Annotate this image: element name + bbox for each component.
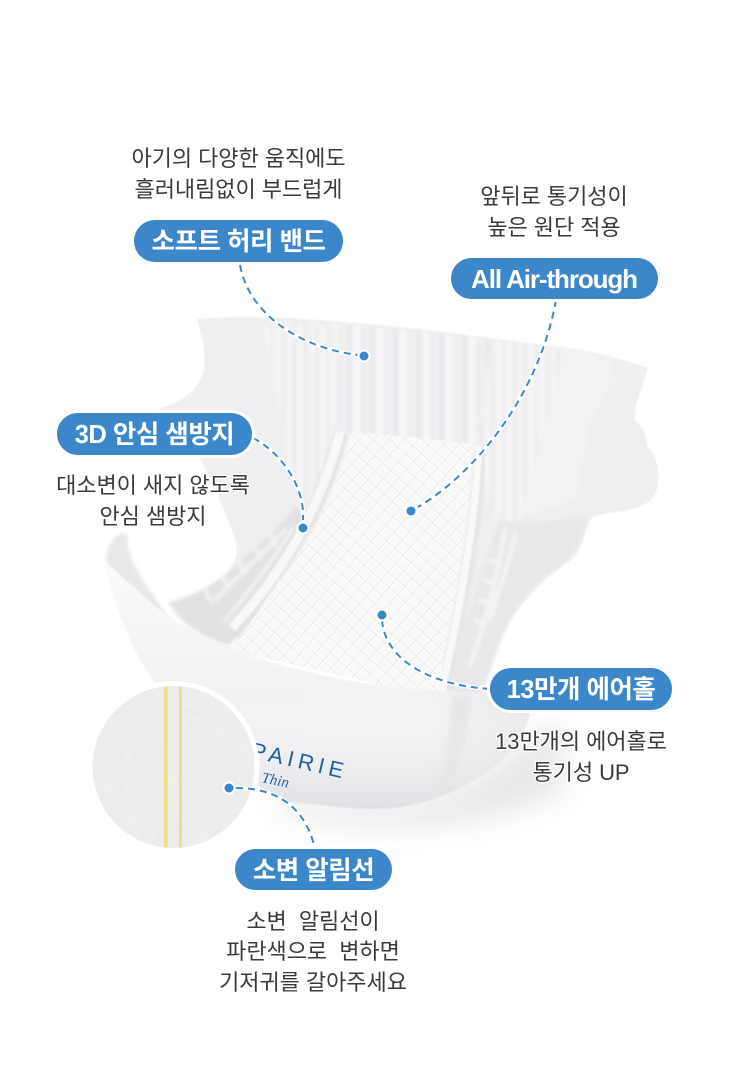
right waist column: [478, 340, 566, 530]
lens white ring: [88, 681, 260, 853]
pill label: [234, 848, 394, 892]
pill label: 소프트 허리 밴드: [152, 228, 325, 256]
description text: 흘러내림없이 부드럽게: [135, 177, 342, 202]
marker dot: [376, 610, 388, 620]
pill label: All Air-through: [471, 264, 637, 294]
callout: 130,000 air holes: [376, 610, 674, 785]
pill label: 13만개 에어홀: [507, 676, 655, 704]
pill label: [488, 666, 674, 712]
description text: 앞뒤로 통기성이: [480, 184, 628, 209]
right ear panel: [520, 349, 615, 518]
description text: 높은 원단 적용: [487, 215, 621, 240]
description text: 아기의 다양한 움직에도: [131, 146, 346, 171]
diaper illustration: [106, 317, 658, 827]
leader line: [418, 300, 556, 507]
marker dot: [406, 506, 416, 516]
lens fabric: [92, 686, 254, 848]
left gathers: [168, 505, 310, 646]
description text: 안심 샘방지: [99, 504, 207, 529]
marker dot: [298, 522, 308, 534]
quilted liner: [230, 432, 481, 700]
callout: all air-through: [406, 184, 660, 516]
brand logo: [249, 738, 351, 792]
description text: 파란색으로 변하면: [226, 939, 400, 964]
logo subtitle: Thin: [260, 770, 290, 792]
pill label: 3D 안심 샘방지: [75, 421, 234, 449]
left cuff: [228, 432, 342, 628]
description text: 기저귀를 갈아주세요: [219, 970, 407, 995]
inner rear of front band: [106, 533, 170, 640]
right gathers: [440, 516, 588, 700]
marker dot: [224, 782, 234, 794]
pill label: [450, 256, 660, 300]
leader line: [382, 620, 490, 689]
description text: 13만개의 에어홀로: [495, 729, 667, 754]
band shading: [106, 562, 532, 809]
description text: 대소변이 새지 않도록: [56, 473, 250, 498]
band side seam: [436, 695, 472, 795]
callout: 3D leak guard: [56, 412, 308, 534]
right ruffle highlights: [470, 530, 515, 665]
pill label: [56, 412, 254, 456]
yellow indicator lines: [164, 680, 182, 855]
left ruffle highlights: [205, 528, 293, 622]
right cuff: [446, 445, 481, 680]
front band: [106, 562, 532, 809]
pill label: 소변 알림선: [253, 857, 374, 885]
left waist column: [262, 322, 342, 510]
back waist and side ears: [153, 317, 658, 700]
waist pleats: [334, 325, 492, 445]
marker dot: [358, 350, 370, 362]
logo wordmark: PAIRIE: [249, 738, 351, 784]
callout: wetness indicator: [219, 782, 407, 995]
description text: 소변 알림선이: [246, 909, 380, 934]
zoom lens: indicator lines: [88, 680, 260, 855]
leader line: [240, 265, 359, 355]
callout: soft waist band: [131, 146, 370, 362]
description text: 통기성 UP: [532, 760, 630, 785]
pill label: [132, 218, 344, 264]
leader line: [236, 788, 314, 845]
shadow under diaper: [280, 720, 565, 827]
leader line: [253, 438, 303, 520]
